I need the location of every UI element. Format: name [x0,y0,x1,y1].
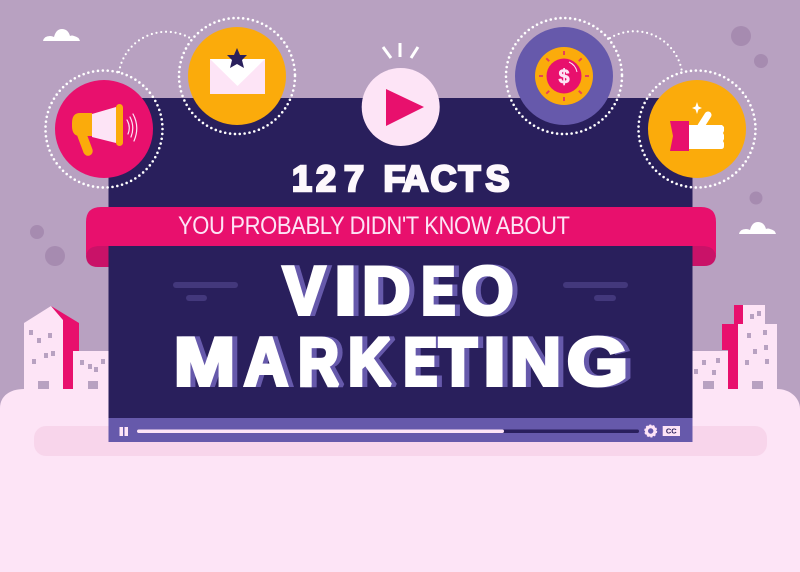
heading: marketing: R [298,324,339,400]
subtitle on ribbon: YOU PROBABLY DIDN'T KNOW ABOUT [178,212,570,239]
decorative dashes left [173,282,238,301]
ground [0,389,800,572]
heading: marketing: E [403,324,437,400]
icon: megaphone badge [46,70,162,188]
icon: left cloud [43,29,80,41]
heading: marketing: G [567,324,628,400]
icon: play button [362,43,440,146]
heading: marketing: A [244,324,288,400]
heading: marketing: N [510,324,561,400]
left city buildings [24,306,109,401]
heading: marketing: K [348,324,391,400]
icon: settings gear [645,425,656,437]
progress bar [137,430,639,433]
ground shadow bar [34,426,767,456]
icon: dollar coin badge: $ [558,66,570,88]
icon: pause [120,427,128,436]
heading: video: V [283,253,325,329]
decorative background circles [30,26,768,266]
icon: envelope badge [179,18,295,134]
heading: video: D [362,253,410,329]
heading: marketing: I [484,324,506,400]
icon: dollar coin badge [506,18,622,134]
dotted connector arcs [119,31,682,72]
ribbon [86,207,716,267]
heading: video: E [421,253,455,329]
right city buildings [692,305,777,401]
icon: thumbs up badge [638,70,756,188]
heading: marketing: M [174,324,235,400]
heading: video: O [461,253,513,329]
decorative dashes right [563,282,628,301]
heading: 127 facts: 127 FACTS [292,158,510,199]
panel: video player screen [108,98,692,418]
icon: right cloud [739,222,776,234]
panel: player control bar [108,418,692,442]
icon: closed captions: CC [666,427,677,436]
heading: marketing: T [439,324,477,400]
heading: video: I [334,253,356,329]
icon: closed captions [663,426,680,436]
